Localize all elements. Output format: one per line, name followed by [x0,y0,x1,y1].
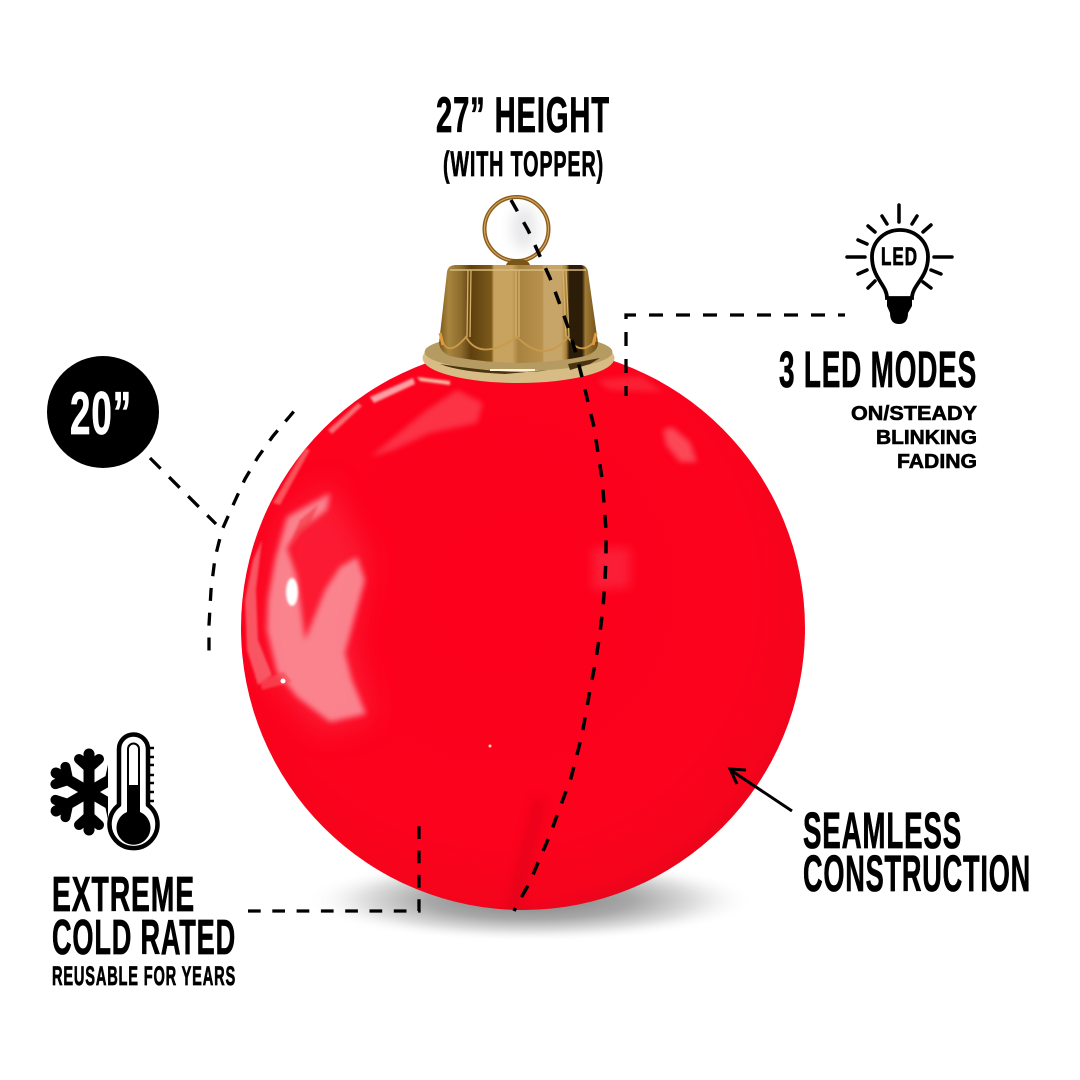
ornament shadow [305,858,755,942]
flange [422,333,614,383]
cap details [440,270,596,351]
LED modes text [779,341,978,473]
soft glow around highlight [262,480,375,735]
ring collar [506,259,530,265]
arrow to seam [730,769,792,811]
upper highlights [370,390,483,457]
LED modes text: BLINKING [876,427,977,449]
height heading [436,87,610,184]
left edge highlight [245,540,272,685]
cold leader [248,817,419,911]
extreme cold label: EXTREME [52,868,195,922]
extreme cold label [52,868,236,991]
icon: thermometer [110,734,158,848]
height heading: 27” HEIGHT [436,87,610,143]
20 inch circle badge [47,356,159,468]
extreme cold label: REUSABLE FOR YEARS [52,961,236,991]
seam dashed line [511,200,606,911]
LED modes text: ON/STEADY [851,403,978,425]
icon: LED bulb: LED [881,243,918,271]
cap body [439,265,598,363]
LED modes text: FADING [897,451,977,473]
large left highlight [267,493,366,722]
icon: snowflake [50,748,108,836]
red ornament ball [241,346,805,912]
bright specular spot [286,578,298,606]
extreme cold label: COLD RATED [52,911,236,965]
diameter leader [150,458,216,524]
gold topper [422,197,614,383]
height heading: (WITH TOPPER) [443,145,604,184]
right highlights [663,427,697,462]
LED leader [626,315,845,396]
icon: LED bulb [847,205,952,324]
seamless construction label [803,802,1031,902]
seam shading [512,800,540,912]
20 inch circle badge: 20” [70,380,132,447]
ring [484,197,548,261]
diameter dashed arc [209,410,295,662]
